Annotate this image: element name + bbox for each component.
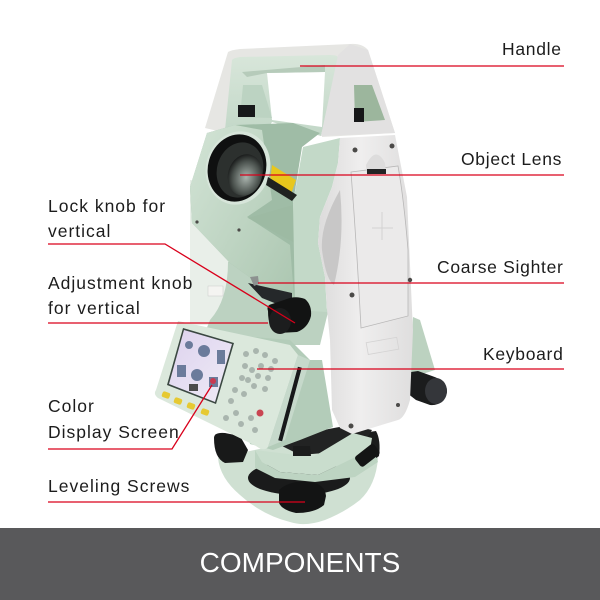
keyboard panel: [155, 321, 310, 449]
label: Object Lens: Object Lens: [461, 149, 562, 169]
serial sticker: [208, 286, 223, 296]
laser warning label: [266, 165, 297, 201]
callout line: keyboard: [257, 368, 564, 370]
leveling screw front: [279, 482, 326, 513]
objective lens: [197, 124, 279, 212]
rear bracket and knob: [404, 317, 447, 405]
side lever: [354, 443, 381, 468]
label: Handle: Handle: [502, 39, 562, 59]
right white body: [318, 135, 413, 434]
tribrach green housing: [255, 447, 378, 482]
function keys: [161, 391, 210, 416]
callout lines: [48, 66, 564, 502]
keypad buttons: [223, 348, 278, 433]
callout line: handle: [300, 65, 564, 67]
handle right window: [354, 85, 385, 122]
left white column: [190, 180, 232, 325]
label: Color Display Screen: Color: [48, 396, 95, 416]
dark bracket under telescope: [248, 283, 292, 310]
callout line: lock knob: [48, 244, 295, 323]
rear screws: [214, 431, 380, 470]
tribrach base plate: [218, 440, 378, 524]
colour display screen: [167, 328, 234, 404]
callout line: object lens: [240, 174, 564, 176]
callout line: leveling screws: [48, 501, 305, 503]
callout line: coarse sighter: [258, 282, 564, 284]
coarse sighter: [250, 276, 259, 286]
callout line: colour display: [48, 385, 212, 449]
handle opening: [267, 72, 325, 127]
telescope housing: [190, 123, 320, 310]
banner title: COMPONENTS: [200, 547, 400, 578]
control panel shoulder: [230, 335, 333, 450]
icon: total station instrument: [155, 44, 447, 524]
battery cover: [351, 154, 408, 355]
dark underside of body: [270, 425, 372, 455]
telescope lower face: [248, 205, 295, 243]
handle left window: [240, 85, 272, 118]
label: Lock knob for vertical: Lock knob for: [48, 196, 166, 216]
banner background: [0, 528, 600, 600]
label: Adjustment knob for vertical: for vertical: [48, 298, 141, 318]
label: Adjustment knob for vertical: Adjustment knob: [48, 273, 193, 293]
label: Leveling Screws: Leveling Screws: [48, 476, 190, 496]
dark ring: [248, 461, 350, 495]
handle: [205, 44, 395, 137]
label: Keyboard: Keyboard: [483, 344, 564, 364]
label: Lock knob for vertical: vertical: [48, 221, 111, 241]
vertical knob: [268, 297, 311, 334]
side grip: [322, 190, 342, 285]
body screws: [195, 144, 412, 428]
lower green centre: [200, 240, 328, 345]
centre green column: [293, 138, 340, 312]
label: Coarse Sighter: Coarse Sighter: [437, 257, 564, 277]
callout line: adjustment knob: [48, 322, 268, 324]
screw stem: [293, 446, 311, 456]
label: Color Display Screen: Display Screen: [48, 422, 180, 442]
